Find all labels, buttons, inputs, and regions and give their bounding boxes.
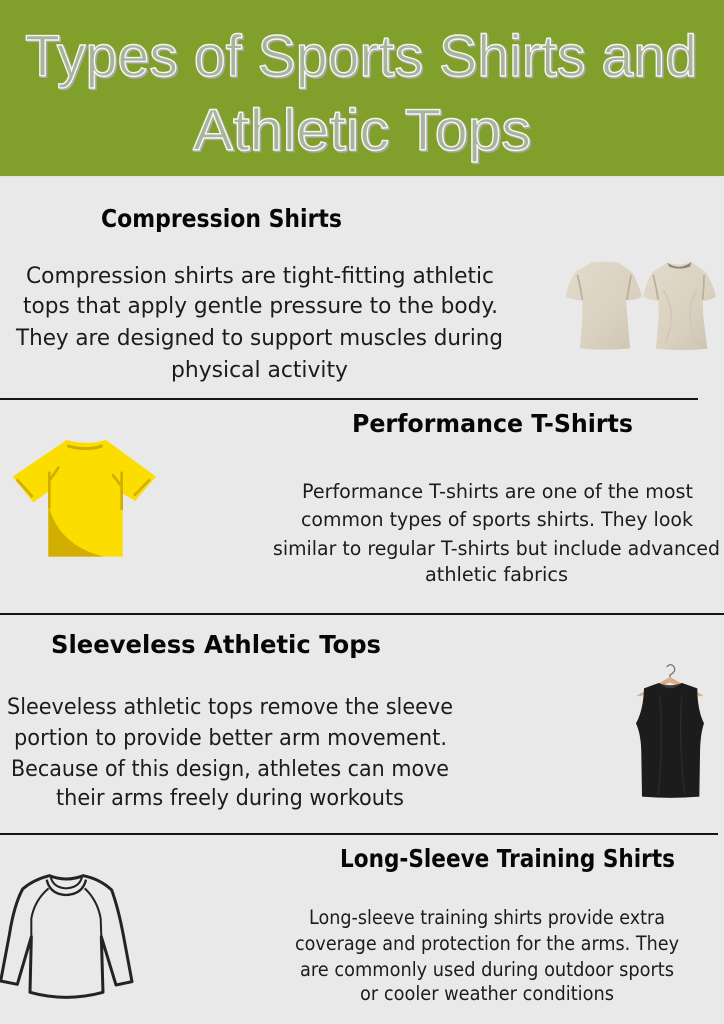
text: sleeveless athletic tops description [7,694,453,811]
heading: sleeveless athletic tops: Sleeveless Athletic Tops [51,630,381,659]
text: performance t-shirts description: common types of sports shirts. They look [301,508,694,531]
text: long-sleeve training shirts description: Long-sleeve training shirts provide extra [309,906,665,929]
title: Athletic Tops [193,98,531,163]
heading: performance t-shirts: Performance T-Shirts [352,409,633,438]
text: performance t-shirts description: Performance T-shirts are one of the most [302,480,693,503]
heading: long-sleeve training shirts: Long-Sleeve Training Shirts [340,844,675,873]
divider [0,613,724,615]
text: sleeveless athletic tops description: Sleeveless athletic tops remove the sleeve [7,694,453,720]
title: Types of Sports Shirts and [25,24,697,89]
text: long-sleeve training shirts description: or cooler weather conditions [360,982,614,1005]
text: long-sleeve training shirts description: are commonly used during outdoor sports [300,958,674,981]
text: performance t-shirts description: similar to regular T-shirts but include advanced [273,537,720,560]
panel: sleeveless athletic tops [7,630,704,811]
text: sleeveless athletic tops description: portion to provide better arm movement. [14,725,447,751]
text: long-sleeve training shirts description: coverage and protection for the arms. They [295,932,679,955]
text: sleeveless athletic tops description: Because of this design, athletes can move [11,756,449,782]
divider [0,833,718,835]
text: performance t-shirts description [273,480,720,586]
icon: beige t-shirts [566,262,716,350]
icon: black sleeveless top on hanger [636,665,704,798]
icon: yellow t-shirt [13,440,156,557]
title: Types of Sports Shirts and [26,26,698,90]
panel: long-sleeve training shirts [1,844,679,1005]
panel: performance t-shirts [13,409,720,586]
panel: compression shirts [15,204,716,383]
text: compression shirts description [15,263,503,383]
heading: compression shirts: Compression Shirts [101,204,342,233]
icon: long-sleeve outline shirt [1,876,132,997]
text: compression shirts description: physical activity [171,357,348,383]
title [25,24,698,164]
divider [0,398,698,400]
header banner [0,0,724,177]
title: Athletic Tops [194,100,532,164]
text: compression shirts description: Compression shirts are tight-fitting athletic [26,263,494,289]
text: performance t-shirts description: athletic fabrics [425,563,568,586]
text: sleeveless athletic tops description: their arms freely during workouts [56,785,404,811]
text: compression shirts description: They are designed to support muscles during [15,325,503,351]
text: long-sleeve training shirts description [295,906,679,1005]
text: compression shirts description: tops that apply gentle pressure to the body. [23,293,498,319]
